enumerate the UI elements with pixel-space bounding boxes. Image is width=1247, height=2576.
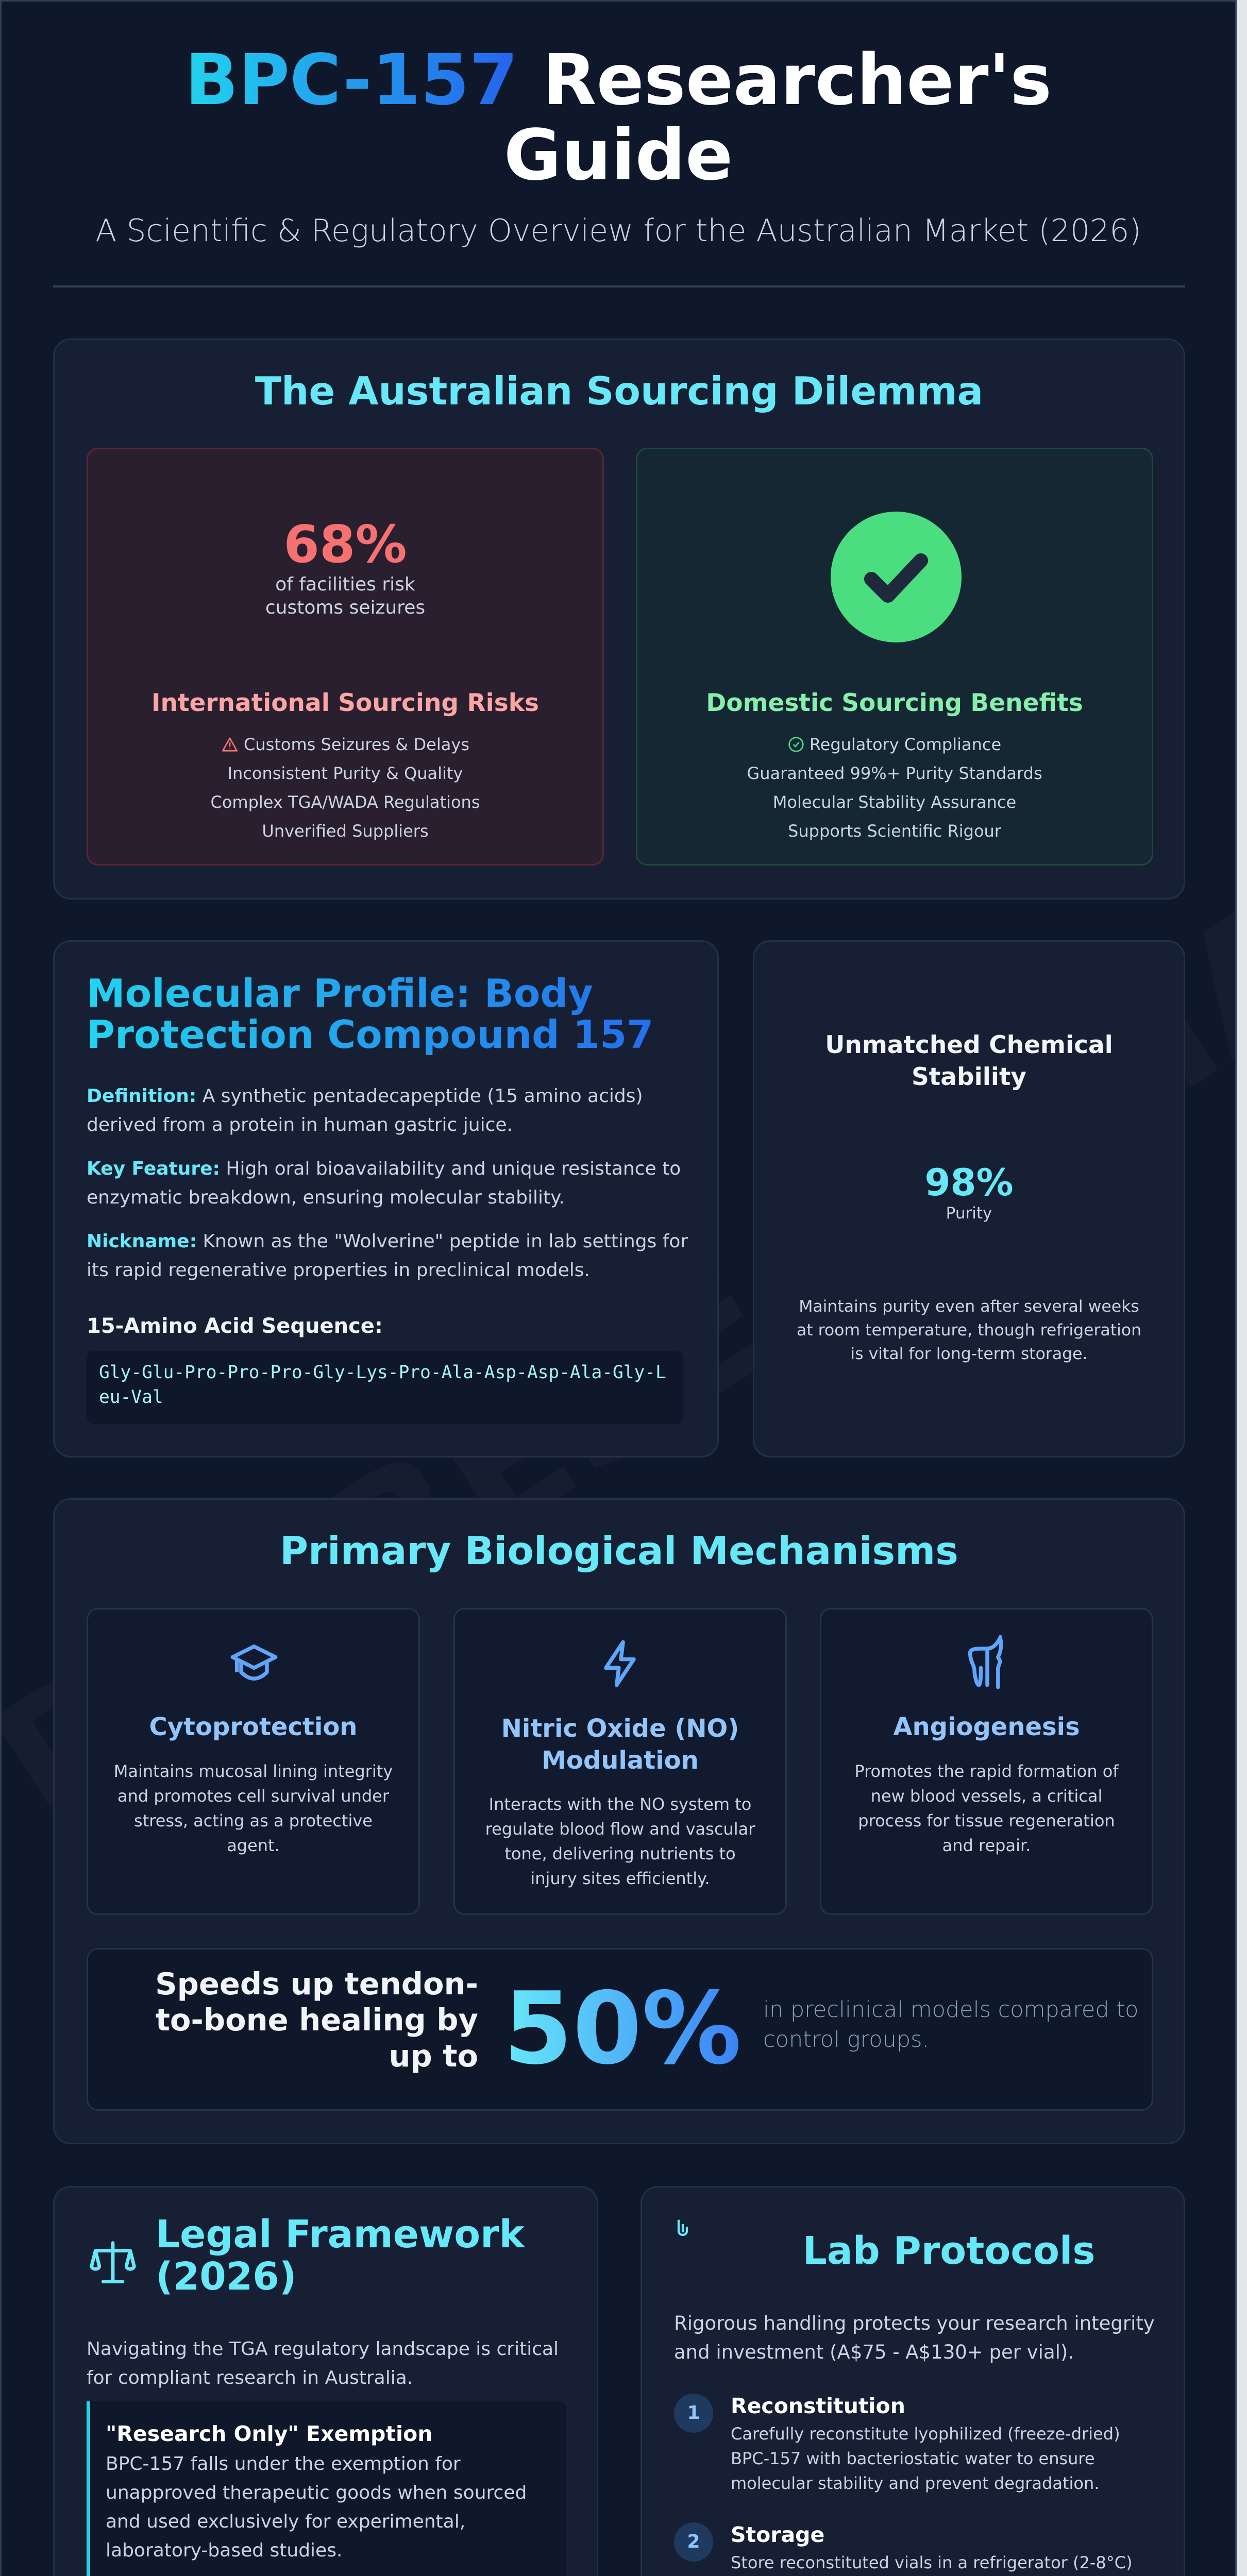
heading: legal framework: Legal Framework (156, 2212, 525, 2257)
text: stability: Maintains purity even after several weeks at room temperature, though refrigeration is vital for long-term storage. (797, 1297, 1141, 1363)
card: domestic benefits (636, 448, 1153, 866)
list: benefits (747, 735, 1042, 841)
card: nitric oxide (453, 1608, 787, 1915)
text: speeds up (155, 1966, 478, 2074)
text: angiogenesis: Promotes the rapid formation of new blood vessels, a critical process for tissue regeneration and repair. (854, 1761, 1119, 1855)
list: benefits: Supports Scientific Rigour (788, 821, 1001, 841)
heading: stability (825, 1031, 1113, 1091)
heading: international risks: International Sourcing Risks (151, 689, 539, 717)
list: risks: Inconsistent Purity & Quality (228, 764, 463, 783)
heading: nitric oxide: Nitric Oxide (NO) (501, 1714, 739, 1743)
heading: stability: Stability (912, 1063, 1026, 1091)
text: cytoprotection: Maintains mucosal lining integrity and promotes cell survival under stress, acting as a protective agent. (114, 1761, 393, 1855)
text: definitions: Definition: A synthetic pentadecapeptide (15 amino acids) derived from a protein in human gastric juice. (87, 1086, 643, 1136)
heading: domestic benefits: Domestic Sourcing Benefits (706, 689, 1083, 717)
panel: lab protocols (641, 2186, 1185, 2576)
heading: molecular profile (87, 973, 715, 1055)
list: benefits: Guaranteed 99%+ Purity Standards (747, 764, 1042, 783)
heading: molecular profile: Molecular Profile: Body (87, 971, 593, 1016)
text: lab intro: Rigorous handling protects your research integrity and investment (A$75 - A$130+ per vial). (674, 2312, 1155, 2363)
text: speeds up: up to (389, 2038, 478, 2074)
list: risks: Complex TGA/WADA Regulations (210, 792, 480, 812)
callout: research only: "Research Only" Exemption (106, 2421, 432, 2446)
stat: 68% (265, 514, 425, 618)
stat: 98%: 98% (924, 1161, 1014, 1204)
stat: 50%: 50% (503, 1971, 742, 2087)
heading: legal framework: (2026) (156, 2255, 297, 2299)
list: benefits: Molecular Stability Assurance (773, 792, 1016, 812)
title (185, 40, 1052, 196)
list: risks (210, 735, 480, 841)
step 1: reconstitution: Carefully reconstitute lyophilized (freeze-dried) BPC-157 with bacteriostatic water to ensure molecular stability and prevent degradation. (731, 2424, 1120, 2493)
title: Guide (504, 115, 733, 196)
callout: research only: BPC-157 falls under the exemption for unapproved therapeutic goods when sourced and used exclusively for experimental, laboratory-based studies. (106, 2453, 527, 2561)
stat bar: 50% (87, 1948, 1153, 2111)
text: speeds up: Speeds up tendon- (155, 1966, 478, 2002)
panel: chemical stability (753, 940, 1185, 1458)
text: speeds up: to-bone healing by (156, 2002, 478, 2038)
card: cytoprotection (87, 1608, 420, 1915)
heading: nitric oxide: Modulation (542, 1746, 699, 1775)
text: nitric oxide: Interacts with the NO system to regulate blood flow and vascular tone, delivering nutrients to injury sites efficiently. (485, 1794, 755, 1888)
heading: legal framework (156, 2212, 526, 2299)
text: preclinical: in preclinical models compared to (763, 1997, 1138, 2023)
list: benefits: Regulatory Compliance (810, 735, 1001, 754)
heading: stability: Unmatched Chemical (825, 1031, 1113, 1059)
text: preclinical: control groups. (763, 2027, 929, 2053)
stat: 68%: 68% (283, 514, 407, 574)
step 1: reconstitution: 1 (687, 2402, 700, 2424)
step 2: storage (674, 2522, 1133, 2572)
step 1: reconstitution: Reconstitution (731, 2394, 905, 2418)
panel: molecular profile (53, 940, 719, 1458)
code block: sequence (87, 1351, 683, 1424)
icon: bolt (604, 1640, 636, 1687)
icon: vessel (968, 1635, 1003, 1689)
card: international risks (87, 448, 604, 866)
icon: flask (677, 2219, 688, 2236)
heading: molecular profile: Protection Compound 157 (87, 1012, 653, 1057)
heading: cytoprotection: Cytoprotection (149, 1713, 357, 1741)
stat: 68%: customs seizures (265, 597, 425, 618)
list: risks: Unverified Suppliers (262, 821, 429, 841)
card: angiogenesis (820, 1608, 1153, 1915)
text: definitions: Nickname: Known as the "Wolverine" peptide in lab settings for its rapid regenerative properties in preclinical models. (87, 1231, 688, 1281)
icon: scales (90, 2241, 136, 2283)
step 1: reconstitution (674, 2394, 1120, 2493)
stat: 98%: Purity (946, 1204, 992, 1223)
icon: check circle (831, 512, 962, 642)
icon: cap (231, 1645, 277, 1681)
code block: sequence: Gly-Glu-Pro-Pro-Pro-Gly-Lys-Pro-Ala-Asp-Asp-Ala-Gly-Leu-Val (99, 1362, 666, 1408)
subtitle: A Scientific & Regulatory Overview for the Australian Market (2026) (95, 213, 1141, 249)
panel: legal framework (53, 2186, 598, 2576)
heading: angiogenesis: Angiogenesis (893, 1713, 1080, 1741)
text: definitions: Key Feature: High oral bioavailability and unique resistance to enzymatic breakdown, ensuring molecular stability. (87, 1158, 681, 1208)
step 2: storage: Storage (731, 2522, 824, 2547)
heading: sequence: 15-Amino Acid Sequence: (87, 1314, 383, 1338)
heading: sourcing dilemma: The Australian Sourcing Dilemma (255, 368, 983, 414)
callout: research only (87, 2401, 566, 2576)
text: preclinical (763, 1997, 1138, 2053)
text: definitions (87, 1086, 688, 1281)
list: risks: Customs Seizures & Delays (244, 735, 469, 754)
stat: 68%: of facilities risk (275, 574, 415, 595)
title: BPC-157 Researcher's (185, 40, 1052, 121)
panel: mechanisms (53, 1498, 1185, 2144)
step 2: storage: 2 (687, 2531, 700, 2552)
text: legal intro: Navigating the TGA regulatory landscape is critical for compliant research in Australia. (87, 2338, 559, 2388)
panel: sourcing dilemma (53, 338, 1185, 900)
heading: mechanisms: Primary Biological Mechanisms (280, 1528, 958, 1573)
heading: lab protocols: Lab Protocols (803, 2229, 1095, 2273)
heading: nitric oxide (501, 1714, 739, 1775)
